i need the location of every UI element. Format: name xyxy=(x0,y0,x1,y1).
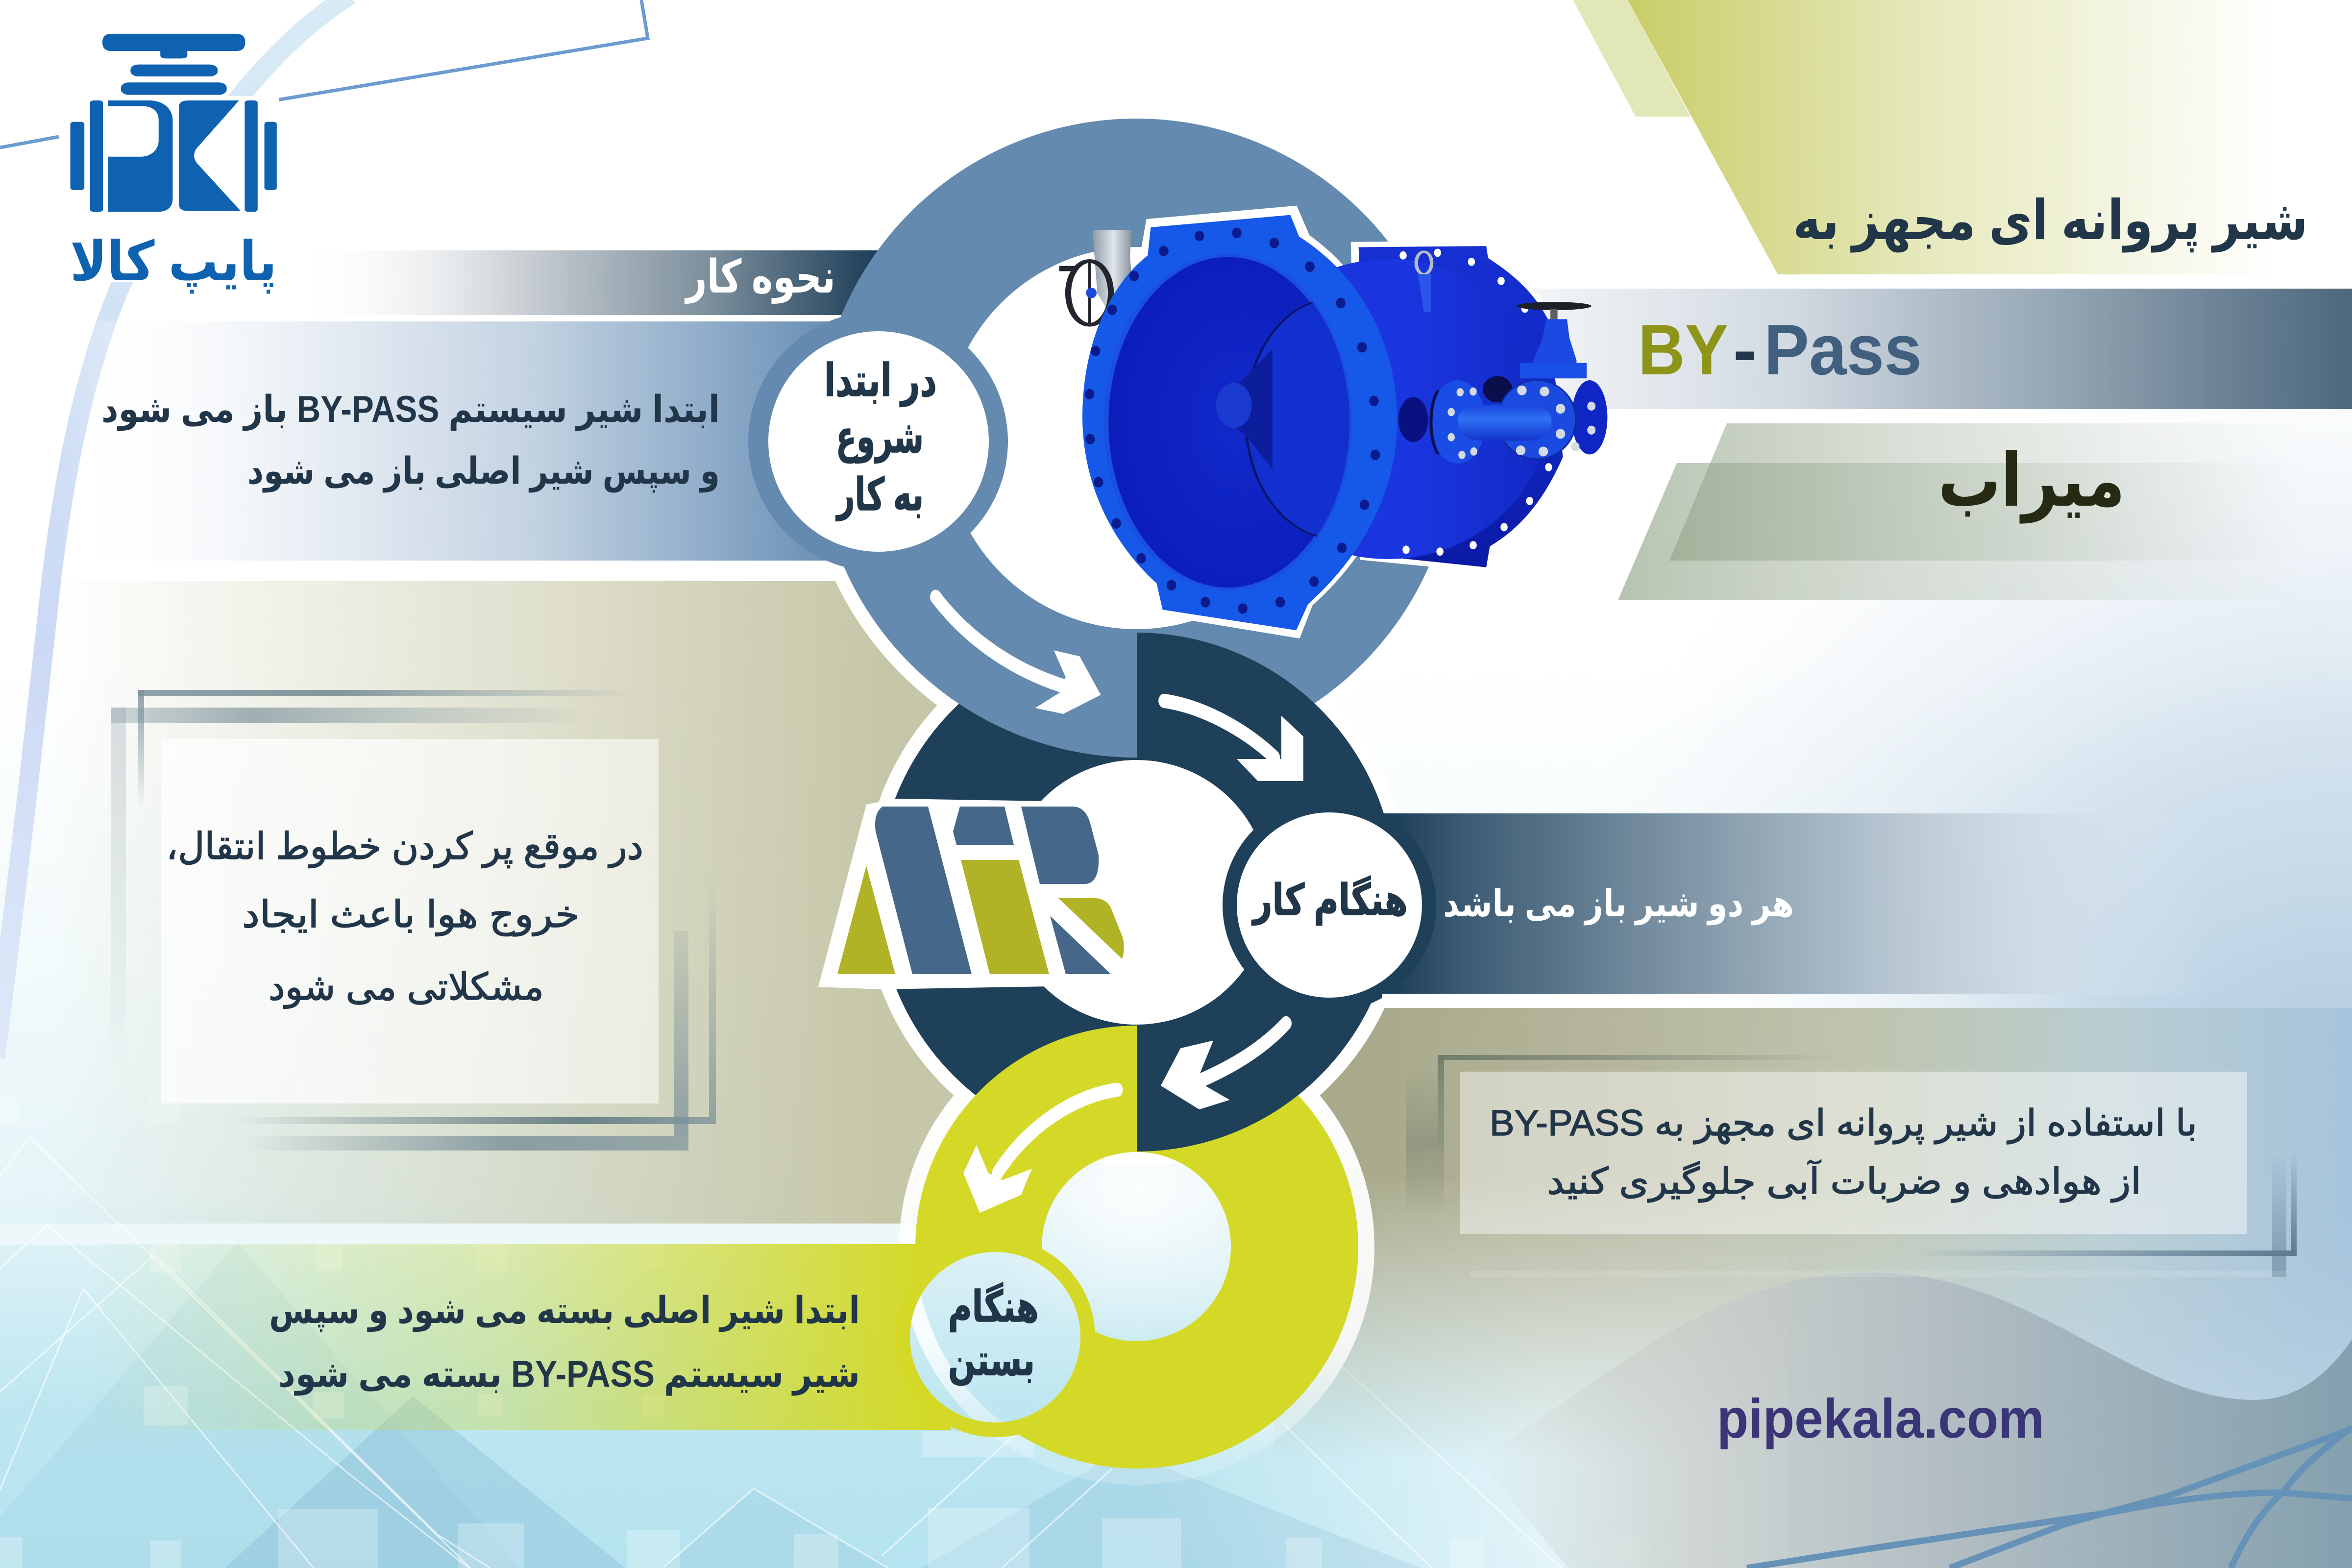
background line pattern xyxy=(0,1137,1562,1568)
band: during operation xyxy=(1323,813,2205,994)
circle: start xyxy=(748,312,1008,571)
valve bypass xyxy=(1398,302,1607,464)
beige panel: left xyxy=(49,581,980,1224)
logo: AIR xyxy=(818,799,1132,989)
valve disc xyxy=(1246,302,1349,537)
background squares xyxy=(0,1096,1649,1568)
AIR R lower olive xyxy=(1058,898,1124,959)
logo letter P xyxy=(108,100,172,212)
text: first start xyxy=(101,389,720,493)
text: closing: شیر سیستم BY-PASS بسته می شود xyxy=(278,1353,860,1396)
AIR R lower blue xyxy=(1050,916,1111,974)
arrow: operation to closing xyxy=(1161,1023,1286,1109)
gray wave xyxy=(1478,1273,2352,1568)
panel: right note xyxy=(1406,1055,2297,1277)
arrow: closing xyxy=(963,1090,1117,1213)
bypass handwheel xyxy=(1517,302,1592,310)
bypass left flange xyxy=(1430,380,1486,464)
text: first start: و سپس شیر اصلی باز می شود xyxy=(247,450,720,493)
left note frame xyxy=(111,690,716,1151)
valve eye bolt xyxy=(1416,252,1432,312)
beige panel: right xyxy=(1274,1008,2352,1440)
how it works heading: نحوه کار xyxy=(685,251,835,304)
valve cone xyxy=(1216,349,1273,469)
white strip above closing band xyxy=(0,1224,931,1245)
ring quadrant: dark over blue xyxy=(1137,633,1396,892)
circle: operation xyxy=(1223,798,1436,1012)
AIR olive stem xyxy=(961,860,1049,974)
logo bars xyxy=(130,65,218,76)
circle text: start: در ابتدا xyxy=(824,356,937,407)
bypass right flange xyxy=(1572,380,1607,455)
circle text: start: شروع xyxy=(836,412,924,464)
valve actuator xyxy=(1059,230,1134,325)
valve body xyxy=(1228,259,1548,559)
bottom-right network lines xyxy=(1747,1427,2352,1568)
valve front flange xyxy=(1082,215,1397,630)
band: BY-Pass xyxy=(1494,289,2352,409)
logo bar lower xyxy=(121,82,227,95)
arrow: operation down xyxy=(1164,701,1303,781)
bypass bolts xyxy=(1447,386,1595,459)
panel: left note xyxy=(111,690,716,1151)
logo: pipekala xyxy=(61,34,279,282)
right note text: از هوادهی و ضربات آبی جلوگیری کنید xyxy=(1547,1159,2141,1202)
left note text xyxy=(166,826,643,1009)
white strip below dark band xyxy=(1382,994,2107,1008)
left note text: مشکلاتی می شود xyxy=(269,966,544,1009)
white outline of rings xyxy=(803,105,1470,1476)
AIR olive triangle xyxy=(837,866,895,974)
ring: lime (closing) xyxy=(895,1026,1358,1469)
logo right flange xyxy=(265,122,277,190)
logo wordmark: پایپ کالا xyxy=(70,231,277,294)
right note text xyxy=(1490,1102,2197,1202)
bypass middle flange xyxy=(1497,380,1576,459)
circle text: closing: هنگام xyxy=(948,1282,1039,1332)
heading: mirab: میراب xyxy=(1938,439,2125,524)
logo inner left flange xyxy=(90,100,103,212)
valve rear holes xyxy=(1399,249,1552,556)
background triangles xyxy=(0,1242,1421,1568)
valve white outline xyxy=(1078,209,1567,635)
logo handle xyxy=(102,34,245,58)
circle text: closing: بستن xyxy=(948,1336,1035,1385)
bypass dark gaps xyxy=(1398,397,1428,442)
circle text: start xyxy=(824,356,937,521)
right note box xyxy=(1460,1072,2247,1234)
text: closing xyxy=(269,1290,860,1396)
right note text: با استفاده از شیر پروانه ای مجهز به BY-PASS xyxy=(1490,1102,2197,1144)
valve bolt holes xyxy=(1085,228,1380,614)
logo inner right flange xyxy=(245,100,258,212)
logo left flange xyxy=(71,122,84,190)
circle text: start: به کار xyxy=(835,470,924,521)
arrows xyxy=(936,597,1303,1213)
band: first start xyxy=(59,321,867,561)
top-left outline line xyxy=(0,0,648,147)
logo letter K xyxy=(179,100,241,211)
ring quadrant: dark over lime xyxy=(1137,892,1396,1152)
left note box xyxy=(161,739,659,1103)
valve bore xyxy=(1106,255,1349,589)
ring: dark (operation) xyxy=(878,633,1396,1152)
text: first start: ابتدا شیر سیستم BY-PASS باز می شود xyxy=(101,389,720,431)
circle text: closing xyxy=(948,1282,1039,1385)
ring: blue (start) xyxy=(817,119,1456,758)
text: closing: ابتدا شیر اصلی بسته می شود و سپس xyxy=(269,1290,860,1332)
website: pipekala.com xyxy=(1717,1388,2044,1449)
AIR blue dot xyxy=(953,807,1014,845)
header shape: title xyxy=(1573,0,2352,274)
left note text: خروج هوا باعث ایجاد xyxy=(242,894,580,936)
bypass pipe xyxy=(1458,405,1551,441)
right note frame xyxy=(1406,1055,2297,1277)
bypass gate body xyxy=(1533,319,1576,375)
heading: BY-Pass: - xyxy=(1733,310,1757,390)
arrow: start to operation xyxy=(936,597,1101,714)
heading: BY-Pass: BY xyxy=(1638,310,1728,390)
valve illustration xyxy=(1059,209,1607,635)
AIR R top xyxy=(1021,807,1099,884)
valve rear flange xyxy=(1359,246,1563,567)
heading: BY-Pass xyxy=(1638,310,1922,390)
band: how it works xyxy=(294,250,906,315)
circle text: operation: هنگام کار xyxy=(1251,875,1408,926)
heading: BY-Pass: Pass xyxy=(1764,310,1922,390)
decorative arc xyxy=(0,0,350,1058)
band shape: mirab xyxy=(1618,423,2352,600)
AIR blue stem xyxy=(875,807,972,974)
ring centre: dark xyxy=(1004,760,1269,1025)
text: during operation: هر دو شیر باز می باشد xyxy=(1443,883,1794,926)
left note text: در موقع پر کردن خطوط انتقال، xyxy=(166,826,643,868)
band: closing xyxy=(88,1244,951,1430)
